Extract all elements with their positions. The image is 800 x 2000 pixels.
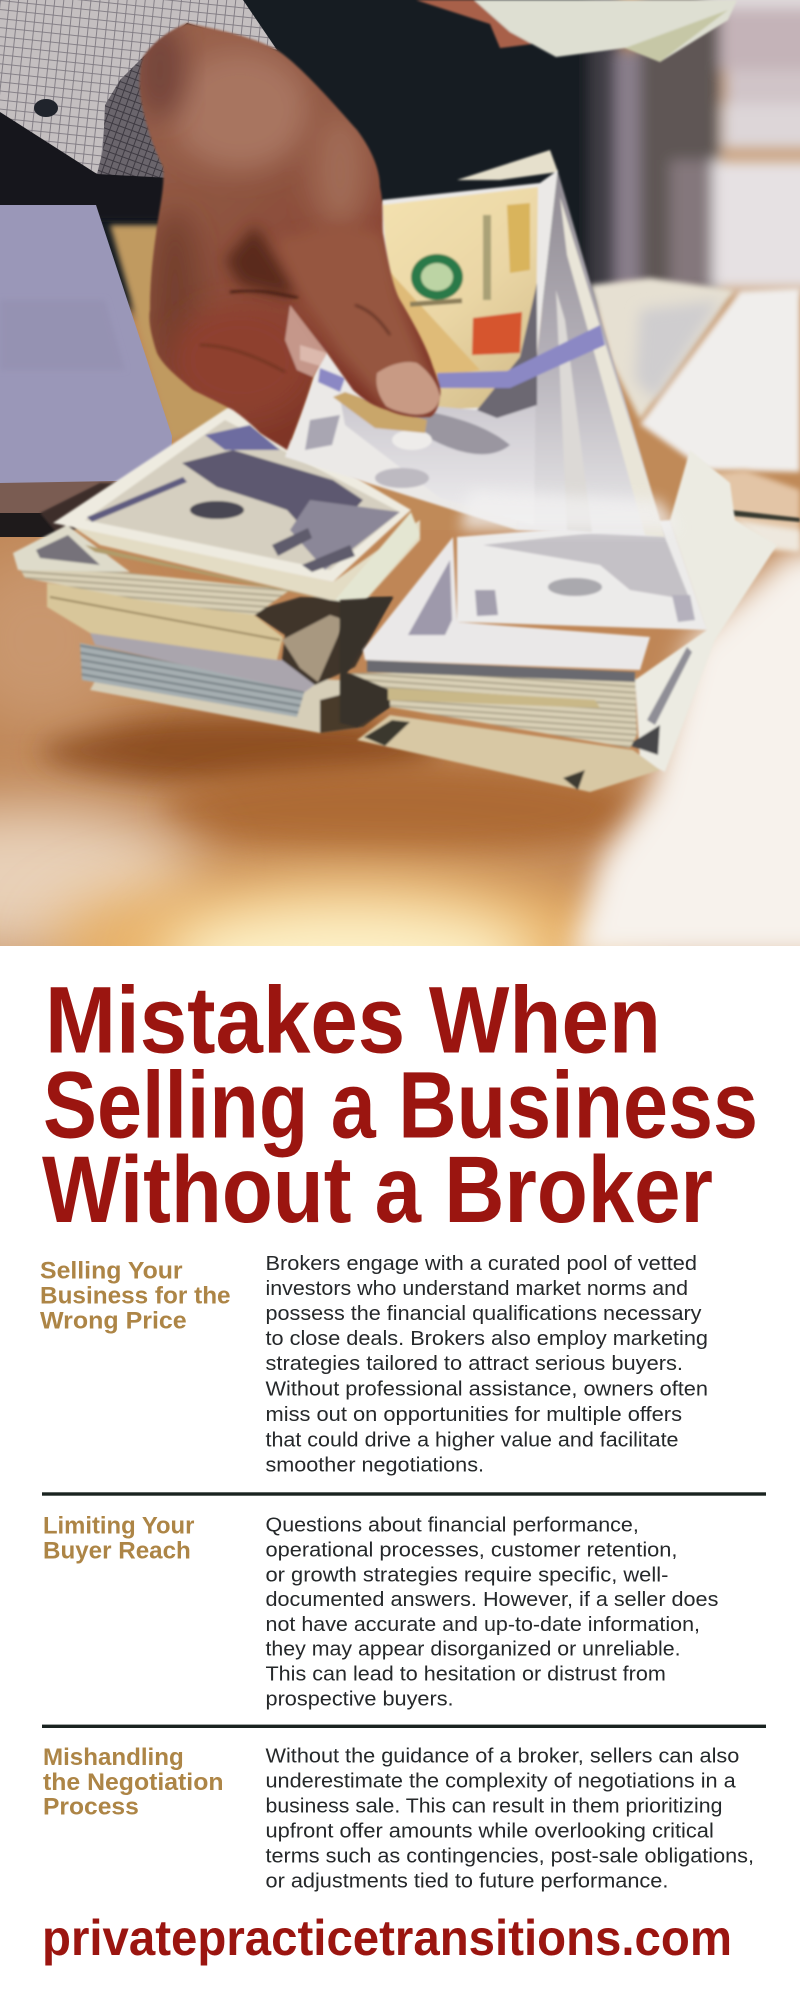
body text: section 3 — [266, 1745, 754, 1892]
body text: section 2: This can lead to hesitation or distrust from — [266, 1663, 666, 1686]
fan of bills held in the hand — [285, 150, 665, 537]
heading: section 1 — [40, 1258, 231, 1335]
soft white fade across the lower edge of the fan — [460, 490, 680, 530]
top bill — [53, 405, 411, 582]
hero photo: hand picking up stacks of hundred dollar bills on a wooden table — [0, 0, 800, 946]
body text: section 2 — [266, 1514, 718, 1711]
body text: section 1: smoother negotiations. — [266, 1453, 484, 1476]
body text: section 1: to close deals. Brokers also employ marketing — [266, 1327, 708, 1350]
body text: section 1 — [266, 1252, 708, 1476]
bottom sheets — [90, 672, 390, 733]
body text: section 1: Brokers engage with a curated pool of vetted — [266, 1252, 697, 1275]
wooden table surface — [0, 530, 800, 1020]
body text: section 2: not have accurate and up-to-date information, — [266, 1613, 700, 1636]
body text: section 1: strategies tailored to attract serious buyers. — [266, 1352, 683, 1375]
blurred room background — [0, 0, 800, 946]
body text: section 2: they may appear disorganized or unreliable. — [266, 1638, 681, 1661]
footer website address: privatepracticetransitions.com — [42, 1910, 732, 1966]
shirt sleeve and cuff — [0, 0, 277, 178]
heading: section 1: Business for the — [40, 1283, 231, 1310]
hand — [130, 15, 450, 455]
body text: section 2: documented answers. However, if a seller does — [266, 1588, 718, 1611]
heading: section 1: Wrong Price — [40, 1308, 187, 1335]
heading: section 2: Limiting Your — [43, 1512, 195, 1539]
text column — [40, 968, 766, 1966]
title: Without a Broker — [42, 1137, 713, 1243]
body text: section 1: investors who understand market norms and — [266, 1277, 688, 1300]
title: Mistakes When — [45, 968, 661, 1074]
body text: section 1: possess the financial qualifications necessary — [266, 1302, 702, 1325]
laptop — [0, 110, 172, 537]
body text: section 1: miss out on opportunities for multiple offers — [266, 1403, 682, 1426]
body text: section 2: Questions about financial performance, — [266, 1514, 639, 1537]
heading: section 3: Mishandling — [43, 1744, 184, 1771]
section 3: mishandling the negotiation process — [43, 1744, 754, 1892]
body text: section 2: operational processes, customer retention, — [266, 1539, 678, 1562]
section 2: limiting your buyer reach — [43, 1512, 718, 1711]
body text: section 1: that could drive a higher value and facilitate — [266, 1428, 678, 1451]
second hand holding money at the top right — [416, 0, 737, 62]
section 1: selling for the wrong price — [40, 1252, 708, 1476]
right stack of bills — [340, 450, 777, 792]
body text: section 3: Without the guidance of a broker, sellers can also — [266, 1745, 739, 1768]
heading: section 3 — [43, 1744, 224, 1821]
body text: section 1: Without professional assistance, owners often — [266, 1377, 708, 1400]
body text: section 3: terms such as contingencies, post-sale obligations, — [266, 1845, 754, 1868]
title — [42, 968, 758, 1243]
heading: section 3: the Negotiation — [43, 1769, 224, 1796]
heading: section 1: Selling Your — [40, 1258, 183, 1285]
body text: section 3: underestimate the complexity of negotiations in a — [266, 1770, 736, 1793]
papers behind the money on the right — [590, 278, 800, 552]
body text: section 3: or adjustments tied to future performance. — [266, 1869, 668, 1892]
heading: section 2: Buyer Reach — [43, 1537, 191, 1564]
body text: section 2: or growth strategies require specific, well- — [266, 1564, 668, 1587]
body text: section 3: business sale. This can result in them prioritizing — [266, 1795, 722, 1818]
left stack of bills — [13, 405, 420, 733]
body text: section 2: prospective buyers. — [266, 1688, 454, 1711]
heading: section 3: Process — [43, 1794, 139, 1821]
heading: section 2 — [43, 1512, 195, 1564]
body text: section 3: upfront offer amounts while overlooking critical — [266, 1820, 714, 1843]
